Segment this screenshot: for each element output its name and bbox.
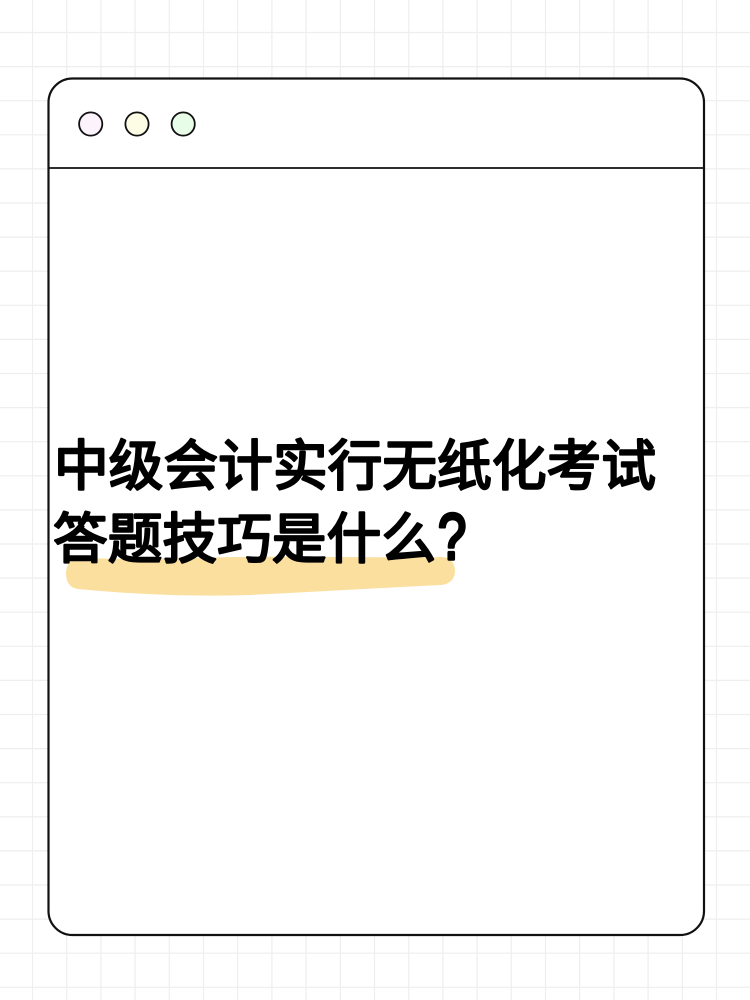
panel: browser window card [48,78,704,935]
title [53,436,656,573]
title: 中级会计实行无纸化考试 [54,436,656,497]
icon: window control dots [79,112,195,136]
highlight brush stroke under title [66,557,455,596]
title: 答题技巧是什么 [53,509,436,570]
title: ? [438,501,466,573]
window title bar divider [48,167,704,169]
